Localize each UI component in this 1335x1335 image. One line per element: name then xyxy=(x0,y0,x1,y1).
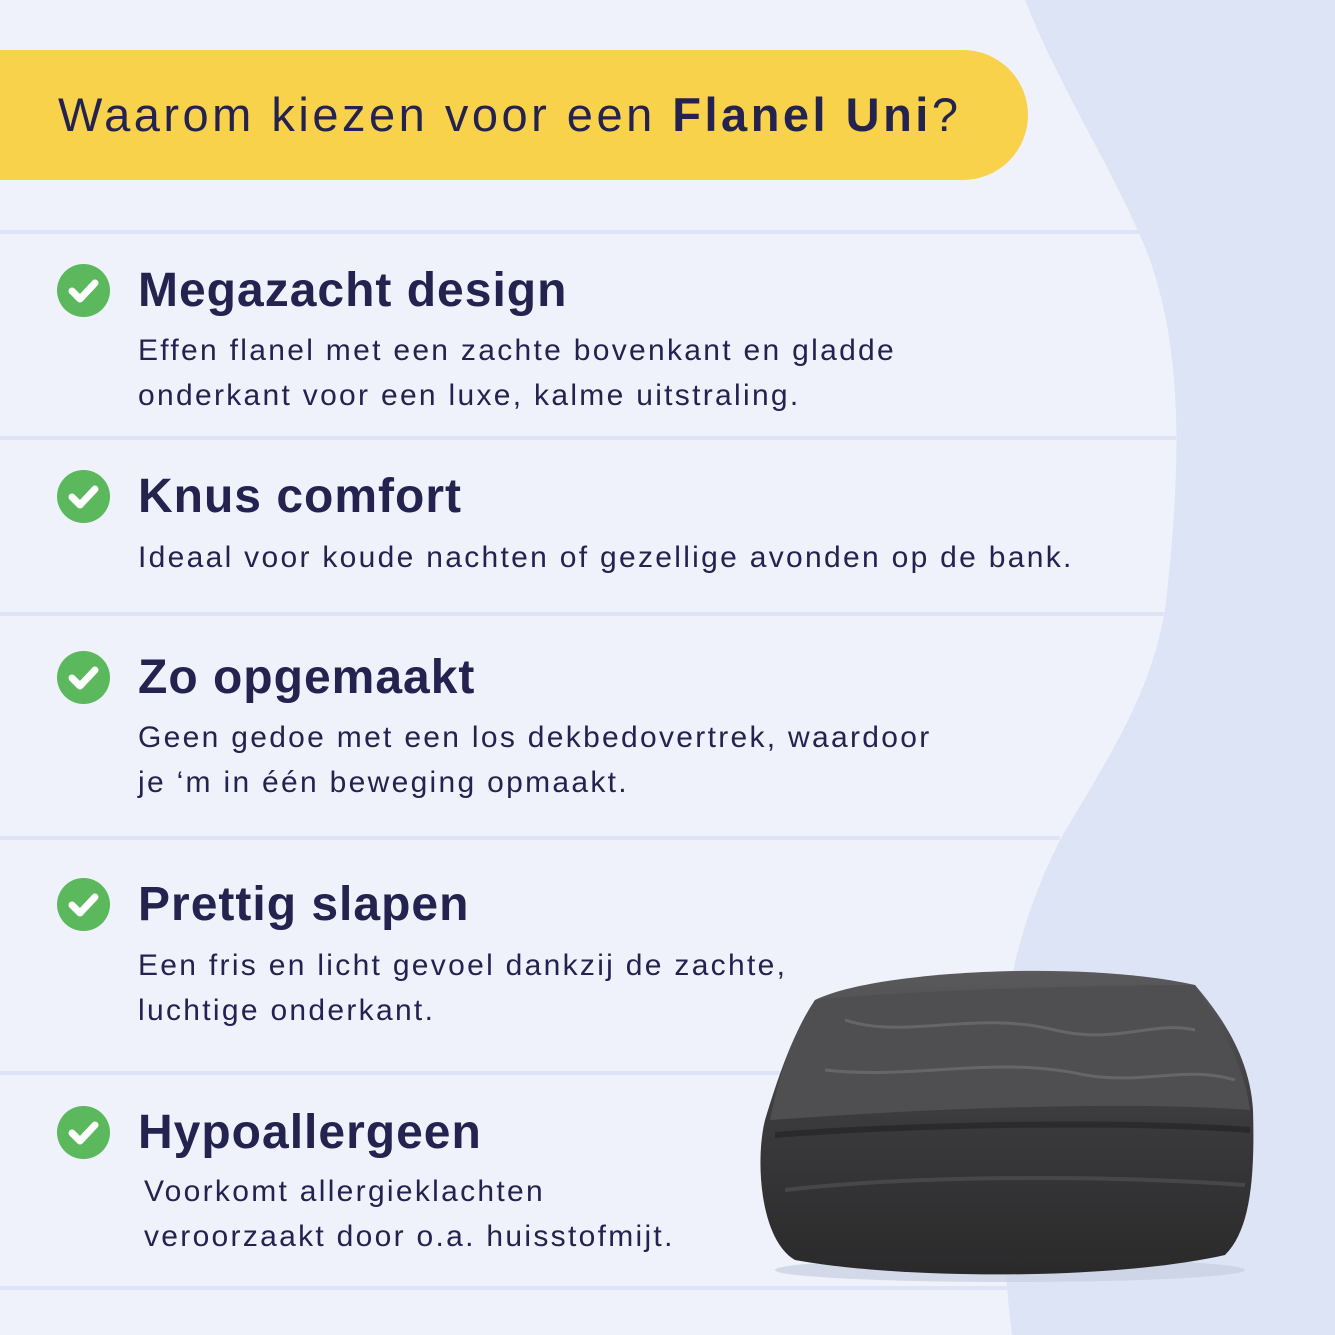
icon: check xyxy=(57,264,110,317)
heading: Hypoallergeen xyxy=(138,1106,482,1159)
text xyxy=(137,721,932,799)
heading: Zo opgemaakt xyxy=(138,651,475,704)
text: Een fris en licht gevoel dankzij de zachte, xyxy=(138,949,787,982)
item: Prettig slapen xyxy=(57,878,787,1027)
text: je ‘m in één beweging opmaakt. xyxy=(138,766,629,799)
text: luchtige onderkant. xyxy=(138,994,435,1027)
image: folded dark blanket xyxy=(760,970,1254,1282)
text: Geen gedoe met een los dekbedovertrek, waardoor xyxy=(138,721,932,754)
item: Hypoallergeen xyxy=(57,1106,675,1253)
heading: Megazacht design xyxy=(138,264,567,317)
text: veroorzaakt door o.a. huisstofmijt. xyxy=(144,1220,675,1253)
text xyxy=(138,334,896,412)
item: Zo opgemaakt xyxy=(57,651,932,799)
icon: check xyxy=(57,878,110,931)
text: Ideaal voor koude nachten of gezellige avonden op de bank. xyxy=(138,541,1074,574)
text: Effen flanel met een zachte bovenkant en gladde xyxy=(138,334,896,367)
text xyxy=(138,949,787,1027)
title banner: Waarom kiezen voor een Flanel Uni? xyxy=(58,88,962,141)
icon: check xyxy=(57,470,110,523)
icon: check xyxy=(57,651,110,704)
heading: Prettig slapen xyxy=(138,878,469,931)
text: onderkant voor een luxe, kalme uitstraling. xyxy=(138,379,801,412)
icon: check xyxy=(57,1106,110,1159)
item: Knus comfort xyxy=(57,470,1074,574)
text xyxy=(144,1175,675,1253)
heading: Knus comfort xyxy=(138,470,462,523)
text: Voorkomt allergieklachten xyxy=(144,1175,545,1208)
item: Megazacht design xyxy=(57,264,896,412)
title banner xyxy=(0,50,1028,180)
